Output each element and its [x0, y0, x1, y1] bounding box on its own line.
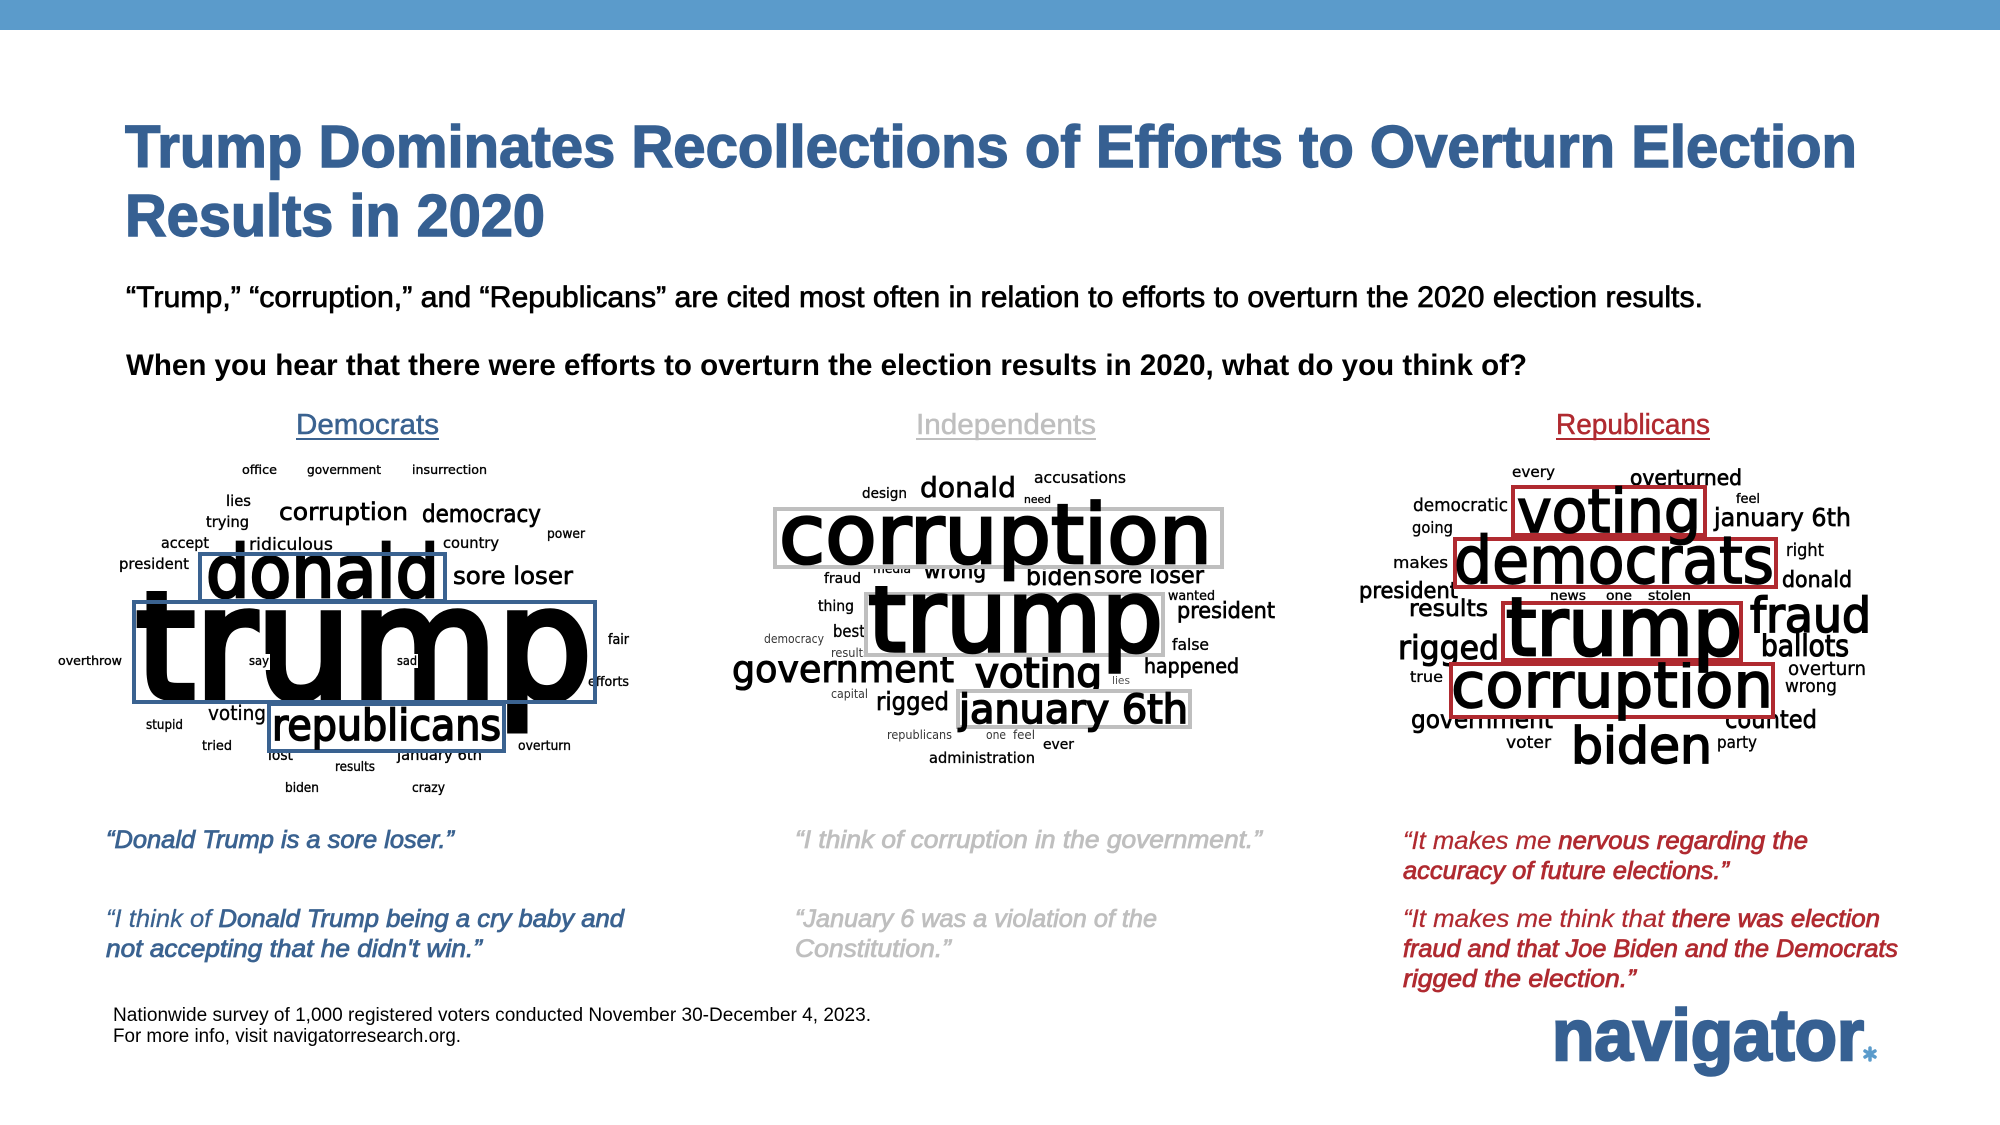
heading: Republicans: Republicans: [1556, 409, 1710, 441]
word cloud: Democrats: results: [335, 760, 375, 775]
word cloud: Independents: accusations: [1034, 468, 1126, 487]
word cloud: Republicans: biden: [1571, 717, 1712, 775]
word cloud: Democrats: government: [307, 463, 381, 477]
word cloud: Democrats: crazy: [412, 781, 445, 796]
word cloud: Democrats: lost: [268, 746, 293, 764]
word cloud: Democrats: power: [547, 527, 586, 542]
word cloud: Republicans: donald: [1782, 568, 1852, 593]
word cloud: Independents: republicans: [887, 728, 952, 742]
word cloud: Republicans: right: [1786, 540, 1824, 561]
top bar: [0, 0, 2000, 30]
word cloud: Democrats: fair: [608, 632, 629, 648]
survey question: When you hear that there were efforts to overturn the election results in 2020, what do you think of?: [126, 349, 1527, 382]
word cloud: Independents: false: [1172, 635, 1209, 654]
heading: Democrats: Democrats: [296, 409, 439, 441]
quotes: Republicans: accuracy of future elections.”: [1403, 857, 1731, 885]
word cloud: Republicans: overturn: [1788, 658, 1866, 680]
word cloud: Republicans: makes: [1393, 553, 1448, 572]
quotes: Democrats: [106, 826, 625, 963]
title: [125, 114, 1857, 249]
quotes: Republicans: “It makes me think that there was election: [1403, 905, 1880, 933]
word cloud: Independents: donald: [920, 471, 1016, 504]
word cloud: Democrats: country: [443, 534, 499, 552]
word cloud: Independents: voting: [975, 649, 1102, 697]
word cloud: Republicans: news: [1550, 589, 1586, 604]
word cloud: Independents: results: [831, 646, 869, 660]
highlighted word: trump: trump: [136, 556, 592, 735]
word cloud: Republicans: need: [1612, 656, 1648, 672]
word cloud: Republicans: party: [1717, 733, 1757, 753]
word cloud: Republicans: democratic: [1413, 495, 1508, 516]
word cloud: Republicans: true: [1410, 668, 1443, 686]
word cloud: Independents: media: [873, 562, 911, 576]
quotes: Republicans: rigged the election.”: [1403, 965, 1638, 993]
word cloud: Democrats: democracy: [422, 500, 541, 528]
word cloud: Democrats: lies: [226, 492, 251, 510]
word cloud: Democrats: insurrection: [412, 463, 487, 477]
word cloud: Republicans: stolen: [1648, 589, 1691, 604]
title: Results in 2020: [125, 183, 545, 249]
word cloud: Democrats: january 6th: [396, 746, 482, 764]
highlighted word: january 6th: january 6th: [958, 687, 1188, 733]
logo: navigator: navigator: [1552, 996, 1864, 1076]
highlighted word: voting: voting: [1517, 477, 1701, 547]
word cloud: Republicans: every: [1512, 463, 1555, 481]
heading: Independents: Independents: [916, 409, 1096, 441]
word cloud: Independents: [732, 468, 1275, 767]
word cloud: Independents: lies: [1112, 674, 1130, 687]
word cloud: Independents: one: [986, 728, 1006, 742]
word cloud: Independents: ever: [1043, 737, 1074, 753]
word cloud: Republicans: one: [1606, 589, 1632, 604]
word cloud: Republicans: results: [1409, 596, 1488, 622]
quotes: Republicans: “It makes me nervous regarding the: [1403, 827, 1808, 855]
footnote: Nationwide survey of 1,000 registered voters conducted November 30-December 4, 2023.: [113, 1005, 871, 1026]
word cloud: Republicans: president: [1359, 579, 1458, 604]
word cloud: Democrats: efforts: [588, 675, 629, 690]
word cloud: Republicans: ballots: [1761, 629, 1849, 663]
word cloud: Democrats: office: [242, 463, 277, 477]
word cloud: Democrats: [58, 463, 629, 796]
word cloud: Independents: sore loser: [1094, 563, 1205, 589]
word cloud: Democrats: stupid: [146, 718, 183, 733]
title: Trump Dominates Recollections of Efforts to Overturn Election: [125, 114, 1857, 180]
quotes: Democrats: “Donald Trump is a sore loser.”: [106, 826, 456, 854]
word cloud: Democrats: sore loser: [453, 562, 573, 590]
panel: Republicans: [1359, 409, 1898, 993]
panel: Independents: [732, 409, 1275, 963]
word cloud: Independents: biden: [1026, 562, 1092, 591]
word cloud: Democrats: trying: [206, 513, 249, 531]
word cloud: Independents: need: [1024, 493, 1051, 506]
word cloud: Republicans: feel: [1736, 492, 1760, 507]
quotes: Independents: Constitution.”: [795, 935, 953, 963]
word cloud: Democrats: biden: [285, 781, 319, 796]
word cloud: Independents: democracy: [764, 632, 824, 646]
quotes: Republicans: fraud and that Joe Biden and the Democrats: [1403, 935, 1898, 963]
word cloud: Republicans: january 6th: [1713, 503, 1851, 532]
word cloud: Democrats: corruption: [279, 498, 408, 526]
word cloud: Republicans: government: [1411, 705, 1553, 734]
word cloud: Republicans: counted: [1725, 705, 1817, 734]
quotes: Independents: “I think of corruption in the government.”: [795, 826, 1264, 854]
word cloud: Republicans: fraud: [1750, 588, 1871, 644]
word cloud: Independents: design: [862, 486, 907, 502]
word cloud: Republicans: rigged: [1398, 628, 1499, 667]
word cloud: Independents: feel: [1013, 728, 1035, 742]
word cloud: Independents: thing: [818, 597, 854, 615]
highlighted word: democrats: democrats: [1454, 524, 1774, 599]
highlighted word: trump: trump: [868, 558, 1163, 675]
word cloud: Democrats: overturn: [518, 739, 571, 754]
word cloud: Democrats: accept: [161, 534, 209, 552]
subtitle: “Trump,” “corruption,” and “Republicans” are cited most often in relation to efforts to overturn the 2020 election results.: [126, 281, 1703, 314]
highlighted word: trump: trump: [1506, 581, 1742, 674]
word cloud: Democrats: president: [119, 555, 189, 573]
word cloud: Democrats: ridiculous: [249, 535, 333, 555]
highlighted word: corruption: corruption: [1451, 649, 1773, 722]
highlighted word: donald: donald: [206, 530, 439, 614]
word cloud: Independents: best: [833, 622, 865, 642]
quotes: Independents: “January 6 was a violation of the: [795, 905, 1157, 933]
footnote: [113, 1005, 871, 1047]
word cloud: Republicans: wrong: [1785, 676, 1837, 697]
word cloud: Republicans: [1359, 463, 1871, 775]
word cloud: Democrats: say: [249, 654, 269, 668]
quotes: Republicans: [1403, 827, 1898, 993]
word cloud: Democrats: tried: [202, 739, 232, 754]
word cloud: Independents: president: [1177, 599, 1275, 624]
word cloud: Independents: wrong: [924, 559, 986, 583]
word cloud: Independents: fraud: [824, 571, 861, 587]
highlighted word: corruption: corruption: [779, 488, 1212, 583]
word cloud: Independents: government: [732, 648, 954, 691]
word cloud: Republicans: voter: [1506, 733, 1551, 753]
word cloud: Independents: wanted: [1168, 589, 1215, 604]
word cloud: Independents: happened: [1144, 654, 1239, 678]
panel: Democrats: [58, 409, 629, 963]
word cloud: Independents: rigged: [876, 687, 949, 716]
word cloud: Republicans: going: [1412, 518, 1453, 537]
word cloud: Democrats: voting: [208, 701, 266, 725]
word cloud: Democrats: sad: [397, 654, 417, 668]
highlighted word: republicans: republicans: [272, 701, 501, 751]
word cloud: Democrats: overthrow: [58, 654, 122, 668]
quotes: Democrats: “I think of Donald Trump being a cry baby and: [106, 905, 625, 933]
word cloud: Independents: capital: [831, 687, 868, 701]
quotes: Independents: [795, 826, 1264, 963]
word cloud: Republicans: overturned: [1630, 466, 1742, 490]
quotes: Democrats: not accepting that he didn't win.”: [106, 935, 484, 963]
footnote: For more info, visit navigatorresearch.org.: [113, 1026, 461, 1047]
word cloud: Independents: administration: [929, 749, 1035, 767]
